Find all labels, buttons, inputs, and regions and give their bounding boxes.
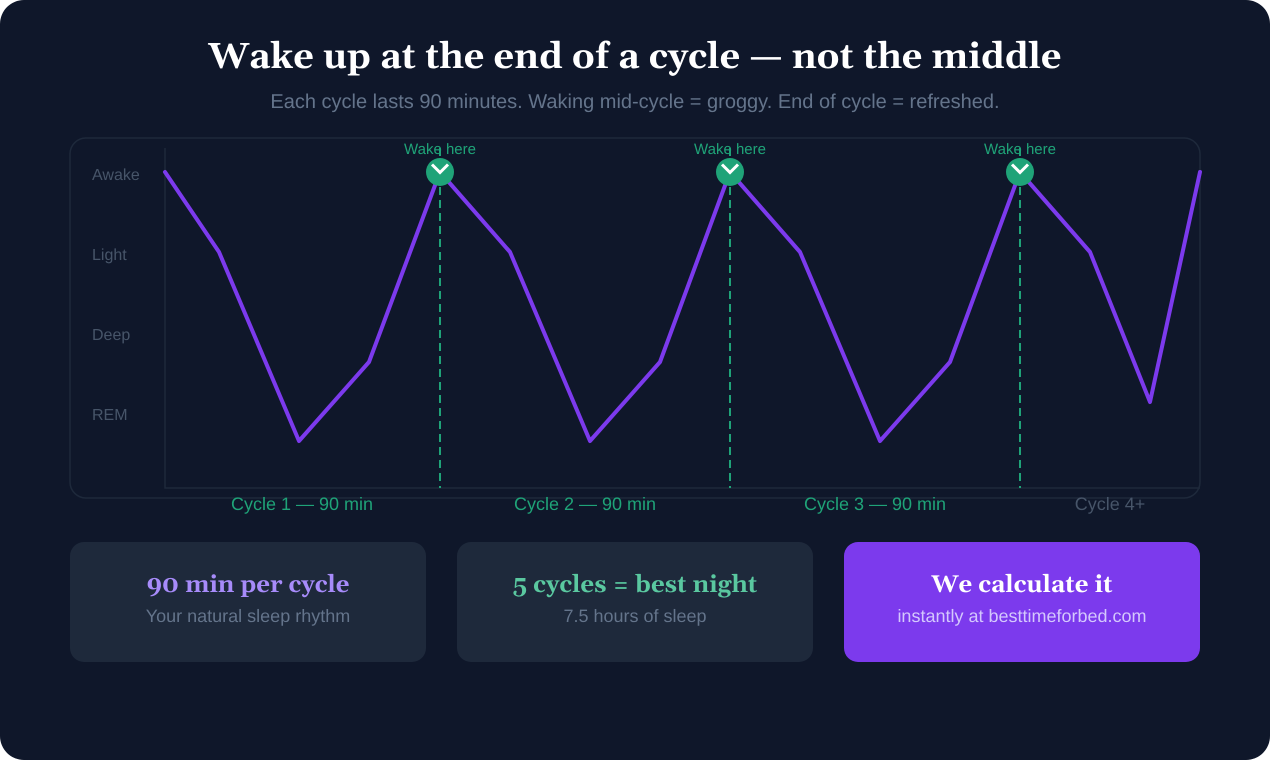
wake marker 2 [716, 158, 744, 186]
axes [165, 148, 1200, 488]
wake labels: Wake here [984, 141, 1056, 158]
card: 90 min per cycle: Your natural sleep rhythm [146, 606, 350, 626]
y-axis labels: Awake [92, 167, 140, 184]
wake labels: Wake here [404, 141, 476, 158]
card: we calculate it: We calculate it [930, 571, 1113, 601]
cycle labels [231, 494, 1145, 514]
title: Wake up at the end of a cycle — not the middle [207, 36, 1062, 81]
card: 90 min per cycle: 90 min per cycle [146, 571, 350, 601]
cycle labels: Cycle 1 — 90 min [231, 494, 373, 514]
wake labels [404, 141, 1056, 158]
wake marker 3 [1006, 158, 1034, 186]
y-axis labels: Light [92, 247, 127, 264]
subtitle: Each cycle lasts 90 minutes. Waking mid-cycle = groggy. End of cycle = refreshed. [270, 91, 1000, 113]
y-axis labels: REM [92, 407, 128, 424]
wake labels: Wake here [694, 141, 766, 158]
sleep cycle line [165, 172, 1200, 441]
card: 90 min per cycle [70, 542, 426, 662]
cycle labels: Cycle 2 — 90 min [514, 494, 656, 514]
y-axis labels: Deep [92, 327, 130, 344]
cycle labels: Cycle 3 — 90 min [804, 494, 946, 514]
card: 5 cycles: 5 cycles = best night [513, 571, 758, 601]
card: we calculate it [844, 542, 1200, 662]
chart panel [70, 138, 1200, 498]
wake guide lines [440, 148, 1020, 488]
card: 5 cycles [457, 542, 813, 662]
y-axis labels [92, 167, 140, 424]
wake marker 1 [426, 158, 454, 186]
card: 5 cycles: 7.5 hours of sleep [563, 606, 707, 626]
cycle labels: Cycle 4+ [1075, 494, 1145, 514]
card: we calculate it: instantly at besttimeforbed.com [897, 606, 1147, 626]
